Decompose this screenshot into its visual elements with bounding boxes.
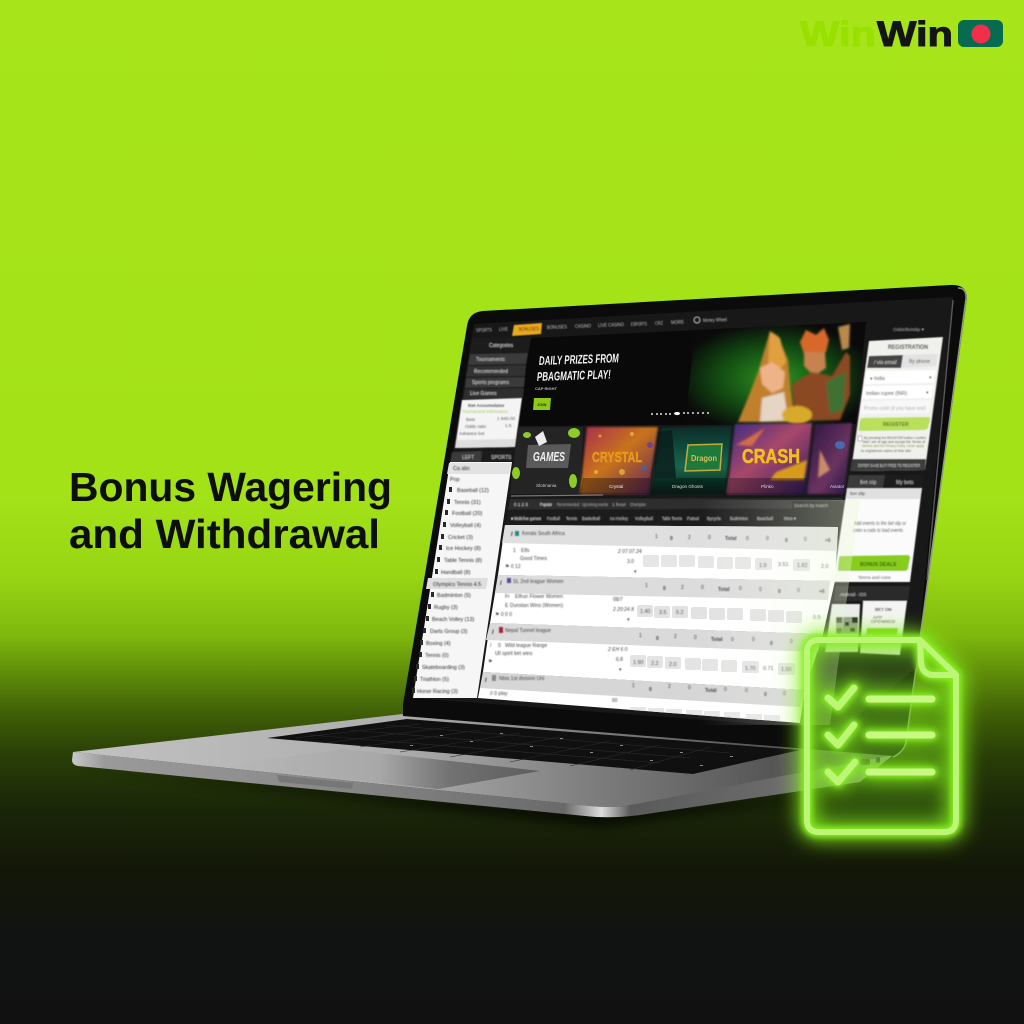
outer glow [807,640,956,832]
sports filter bar: Bycycle [707,516,721,521]
registration panel: / via email [873,360,897,366]
tile: games: Slotmania [536,483,557,488]
match row 1: 1 [513,548,516,554]
sports tab bar: 1 hour [612,502,627,507]
bet slip tabs: Bet slip [860,480,877,486]
registration panel: that I am of age and accept the Terms of [863,440,925,444]
sports tab bar: Upcoming events [582,502,609,507]
banner characters [738,324,850,424]
front notch [277,775,353,789]
match row 3: 0 [731,637,734,643]
match row 3: U [495,651,499,657]
lower right promo panels: Android · iOS [840,592,866,597]
match row 2: 0 [663,586,666,592]
top navigation: MORE [671,320,685,326]
bet slip tabs [847,475,924,488]
empty bet slip panel: Terms and rules [858,575,891,580]
registration panel: ▾ [926,390,929,396]
sports filter bar: Baseball [757,516,773,521]
match row 3: 0 [770,641,773,647]
match row 1: 0 [708,535,711,541]
inner glow [807,640,956,832]
match row 1: 1.9 [759,563,766,569]
sports filter bar: Badminton [730,516,748,521]
match row 1: Good Times [520,556,547,562]
top navigation: BONUSES [519,326,539,333]
match row 3: 6.8 [616,657,623,663]
registration panel: ENTER SAVE BUT FREE TO REGISTER [858,463,920,468]
match row 4 [478,672,805,727]
empty bet slip panel: Add events to the bet slip or [853,521,907,527]
left menu dark items: Live Games [470,391,497,397]
match row 1: 2 07.07.24 [617,549,642,555]
logo word: Win dark: Win [877,15,953,54]
top navigation: Money Wheel [703,317,727,324]
match row 2: Elfrun Flower Women [515,594,563,600]
empty bet slip panel: enter a code to load events [853,528,903,534]
top navigation: ESPORTS [631,321,647,328]
registration panel: ♦ India [870,376,885,382]
sports filter bar: ● Multi-live games [511,516,542,521]
match row 4: 2 [668,684,671,690]
match row 1: +6 [825,538,831,544]
tile: crash: Plinko [761,484,774,489]
sports filter bar: Tennis [566,516,578,521]
sports filter bar: Basketball [582,516,600,521]
banner sub text: CAP RIGHT [535,386,557,391]
match row 1: ▾ [634,569,637,575]
lid edge highlight [893,288,966,757]
laptop base [72,714,893,817]
sports tab bar: Search by match [794,503,829,508]
left sports list: Beach Volley (13) [432,617,474,623]
match row 4: 0 [764,692,767,698]
match row 2: 2 [681,585,684,591]
match row 1: 0 [766,536,769,542]
left sports list: Tennis (31) [454,500,481,506]
bet slip card: 1 940.00 [497,416,515,421]
tile: crystal: Crystal [609,484,623,489]
match row 3 [483,623,823,690]
game tiles [510,423,852,494]
lower right promo panels: APP [873,615,882,620]
left sports list: Badminton (5) [437,593,471,599]
registration panel: Service and the Privacy Policy, which apply [862,444,924,448]
match row 3: 2 [674,634,677,640]
left sports list: Ice Hockey (8) [446,546,481,552]
sports tab bar: Popular [540,502,552,507]
top navigation: BONUSES [547,324,567,331]
sports tab bar: Champion [630,502,646,507]
match row 2: 08/7 [613,597,623,603]
laptop lid [403,285,967,756]
match row 3: 1 [639,633,642,639]
top navigation: CRZ [655,321,663,327]
left menu dark items: Categories [489,343,514,349]
bet slip tabs: My bets [896,480,914,486]
check marks [828,688,855,782]
match row 1: ⚑ 0 12 [505,564,521,570]
sports filter bar: Futsal [687,516,699,521]
empty bet slip panel: Bet slip [850,491,866,496]
match row 4: 1 [632,683,635,689]
lower right promo panels: OPENINGS [871,619,895,624]
side ports [860,757,880,765]
tile: crystal: CRYSTAL [592,449,642,466]
match row 1: 0 [804,537,807,543]
sports tab bar: 0 1 2 3 [514,502,528,507]
bet slip card: Odds ratio [465,424,487,429]
bet slip card: Tournament information [462,409,509,414]
match row 4: 0 [724,687,727,693]
match row 4: Total [705,688,717,694]
left sports list: Horse Racing (3) [417,689,458,695]
banner button: JOIN [537,402,546,407]
top navigation: CASINO [575,323,591,330]
left list tabs [450,451,512,462]
left sports list: Triathlon (5) [420,677,449,683]
match row 3: 0 [752,637,755,643]
match row 3: Nepal Tunnel league [505,628,551,634]
tile: crash: CRASH [742,446,800,468]
match row 3: 0 [656,636,659,642]
laptop shadow [85,768,860,826]
match row 2: ▾ [627,617,630,623]
banner heading [537,351,619,384]
trackpad [218,749,540,789]
banner heading: DAILY PRIZES FROM [539,351,619,368]
icon: Bangladesh flag [958,20,1003,47]
match row 3: 0 [694,635,697,641]
match row 3: / [490,643,492,649]
tile: green slot: Dragon [691,454,717,463]
right column heading: Odds/Betslip ▾ [893,327,925,333]
match row 4: // 0 play [490,691,508,697]
banner button [533,398,551,410]
left sports list [412,462,512,698]
title: and Withdrawal [69,511,380,557]
tile: crash [727,423,812,494]
tile: games: GAMES [533,450,565,464]
left sports list: Ca abc [453,466,470,472]
match row 2: 3.5 [659,610,666,616]
match row 3: 0.71 [763,666,774,672]
match row 1: 0 [670,536,673,542]
registration panel: ▾ [929,375,932,381]
left sports list: Boxing (4) [426,641,451,647]
carousel scrollbar [511,495,603,496]
sports filter bar: Volleyball [635,516,653,521]
top navigation: SPORTS [476,327,492,334]
sports filter bar: Football [547,516,560,521]
match row 4: 0 [745,688,748,694]
match row 4: / [485,678,487,684]
tile: green slot: Dragon Ghosts [672,484,704,489]
bet slip card: Advance bet [459,431,485,436]
match row 2: E [505,603,509,609]
sports tab bar: Recommended [557,502,579,507]
left list tabs: LEFT [462,455,474,461]
sports tab bar [508,498,843,510]
match row 3: 2.0 [669,662,676,668]
match row 1: 0 [785,538,788,544]
left sports list: Skateboarding (3) [422,665,465,671]
registration panel: to registered users of this site [861,449,911,453]
left sports list: Darts Group (3) [430,629,468,635]
match row 4: 0 [783,691,786,697]
match row 4: Nbia 1st division Uni [499,676,544,682]
bet slip card: Bets [466,417,476,422]
match row 2: 1 [645,583,648,589]
screen background [412,297,953,730]
top navigation: LIVE CASINO [598,322,624,329]
match row 3: Total [711,637,723,643]
match row 2: ⚑ 0 0 0 [495,612,512,618]
match row 3: 0 [498,643,501,649]
match row 3: 2 EH 6 0 [607,647,628,653]
left sports list: Handball (8) [441,570,471,576]
empty bet slip panel: BONUS DEALS [860,562,897,568]
match row 2: 0.9 [813,615,820,621]
match row 2: 0 [739,586,742,592]
match row 2: 1.40 [640,609,650,615]
match row 3: 0 [790,639,793,645]
match row 4: 0 [688,685,691,691]
match row 2: 0 [797,588,800,594]
left menu dark items [463,338,531,399]
match row 1 [498,525,838,581]
match row 1: 3.51 [778,562,788,568]
match row 1: 2.0 [821,564,828,570]
left sports list: Football (20) [452,511,482,517]
match row 3: 1.70 [745,666,756,672]
match row 2: SL 2nd league Women [513,579,564,585]
bet slip card [455,398,522,448]
match row 2: / [500,581,502,587]
match row 3: ⚑ [488,659,492,665]
match row 2: 2 20:24 8 [612,607,634,613]
match row 3: ▾ [619,667,622,673]
left sports list: Cricket (3) [448,535,473,541]
match row 3: 1.50 [781,667,792,673]
left list tabs: SPORTS [491,455,512,461]
match row 1: / [511,532,513,538]
match row 2 [490,575,835,634]
match row 4: 60 [612,698,618,704]
checklist lines [869,699,932,772]
match row 2: 0 [778,589,781,595]
fade over screen lower right [700,500,860,725]
match table [478,525,838,727]
match row 1: Elfs [521,548,530,554]
registration panel: REGISTRATION [888,344,928,351]
bet slip card: 1.5 [505,423,512,428]
match row 4: 0 [649,687,652,693]
registration panel: REGISTER [883,422,909,428]
tile: games [510,427,583,494]
match row 3: 1.90 [633,660,644,666]
registration panel: By phone [909,359,930,365]
glowing checklist document icon [807,640,956,832]
registration panel: By pressing the REGISTER button I confirm [864,436,926,440]
inner bezel highlight [927,300,953,580]
left menu dark items: Sports programs [472,380,509,386]
registration panel: Promo code (if you have one) [864,406,926,412]
empty bet slip panel [833,488,922,582]
match row 1: Total [725,536,737,542]
match row 2: 0 [759,587,762,593]
promo banner [516,322,866,426]
tile: green slot [651,426,732,494]
match row 1: 1 [655,534,658,540]
logo word: Win light: Win [800,15,876,54]
left sports list: Table Tennis (8) [444,558,482,564]
left menu dark items: Recommended [474,369,508,375]
left sports list: Volleyball (4) [450,523,481,529]
banner heading: PBAGMATIC PLAY! [537,367,611,384]
title [69,464,392,557]
lower right promo panels [825,586,910,655]
match row 2: Fr [505,594,510,600]
match row 3: 2.2 [651,661,658,667]
top navigation [476,317,727,336]
tile: last [807,423,852,494]
title: Bonus Wagering [69,464,392,510]
tile: last: Aviator [830,484,845,489]
lower right promo panels: BET ON [875,607,892,612]
nav highlight button [512,323,542,336]
laptop [72,285,967,826]
sports filter bar [505,509,842,526]
registration panel [850,337,943,471]
match row 1: 2 [688,535,691,541]
sports filter bar: Table Tennis [662,516,683,521]
screen [412,297,953,730]
left sports list: Baseball (12) [457,488,489,494]
left sports list: Olympics Tennis 4.5 [433,582,481,588]
match row 1: Kerala South Africa [522,531,565,537]
tile: crystal [580,427,658,494]
left sports list: Pop [450,477,460,483]
match row 1: 0 [746,536,749,542]
sports filter bar: Ice Hockey [610,516,629,521]
icon: QR code [836,617,858,634]
document tint [807,640,956,832]
left sports list: Tennis (0) [425,653,449,659]
banner pagination dots [651,412,709,415]
left menu dark items: Tournaments [476,357,505,363]
match row 2: Total [718,587,730,593]
match row 2: +6 [819,589,825,595]
left sports list: Rugby (3) [434,605,458,611]
match row 3: / [492,630,494,636]
keyboard [267,719,800,774]
document outline [807,640,956,832]
match row 2: 0 [701,585,704,591]
sports filter bar: More ▾ [784,516,797,521]
match row 2: Dunstan Wins (Women) [510,603,563,609]
match row 2: 5.2 [676,610,684,616]
registration panel: Indian rupee (INR) [866,391,907,397]
match row 1: 1.82 [797,563,808,569]
logo: WinWin Bangladesh [800,15,1003,54]
match row 3: 0 spirit bet wins [498,651,533,657]
match row 1: 3.0 [627,559,634,565]
match row 3: Wild league Range [505,643,547,649]
top navigation: LIVE [499,327,508,333]
bet slip card: Bet Accumulator [468,403,505,408]
